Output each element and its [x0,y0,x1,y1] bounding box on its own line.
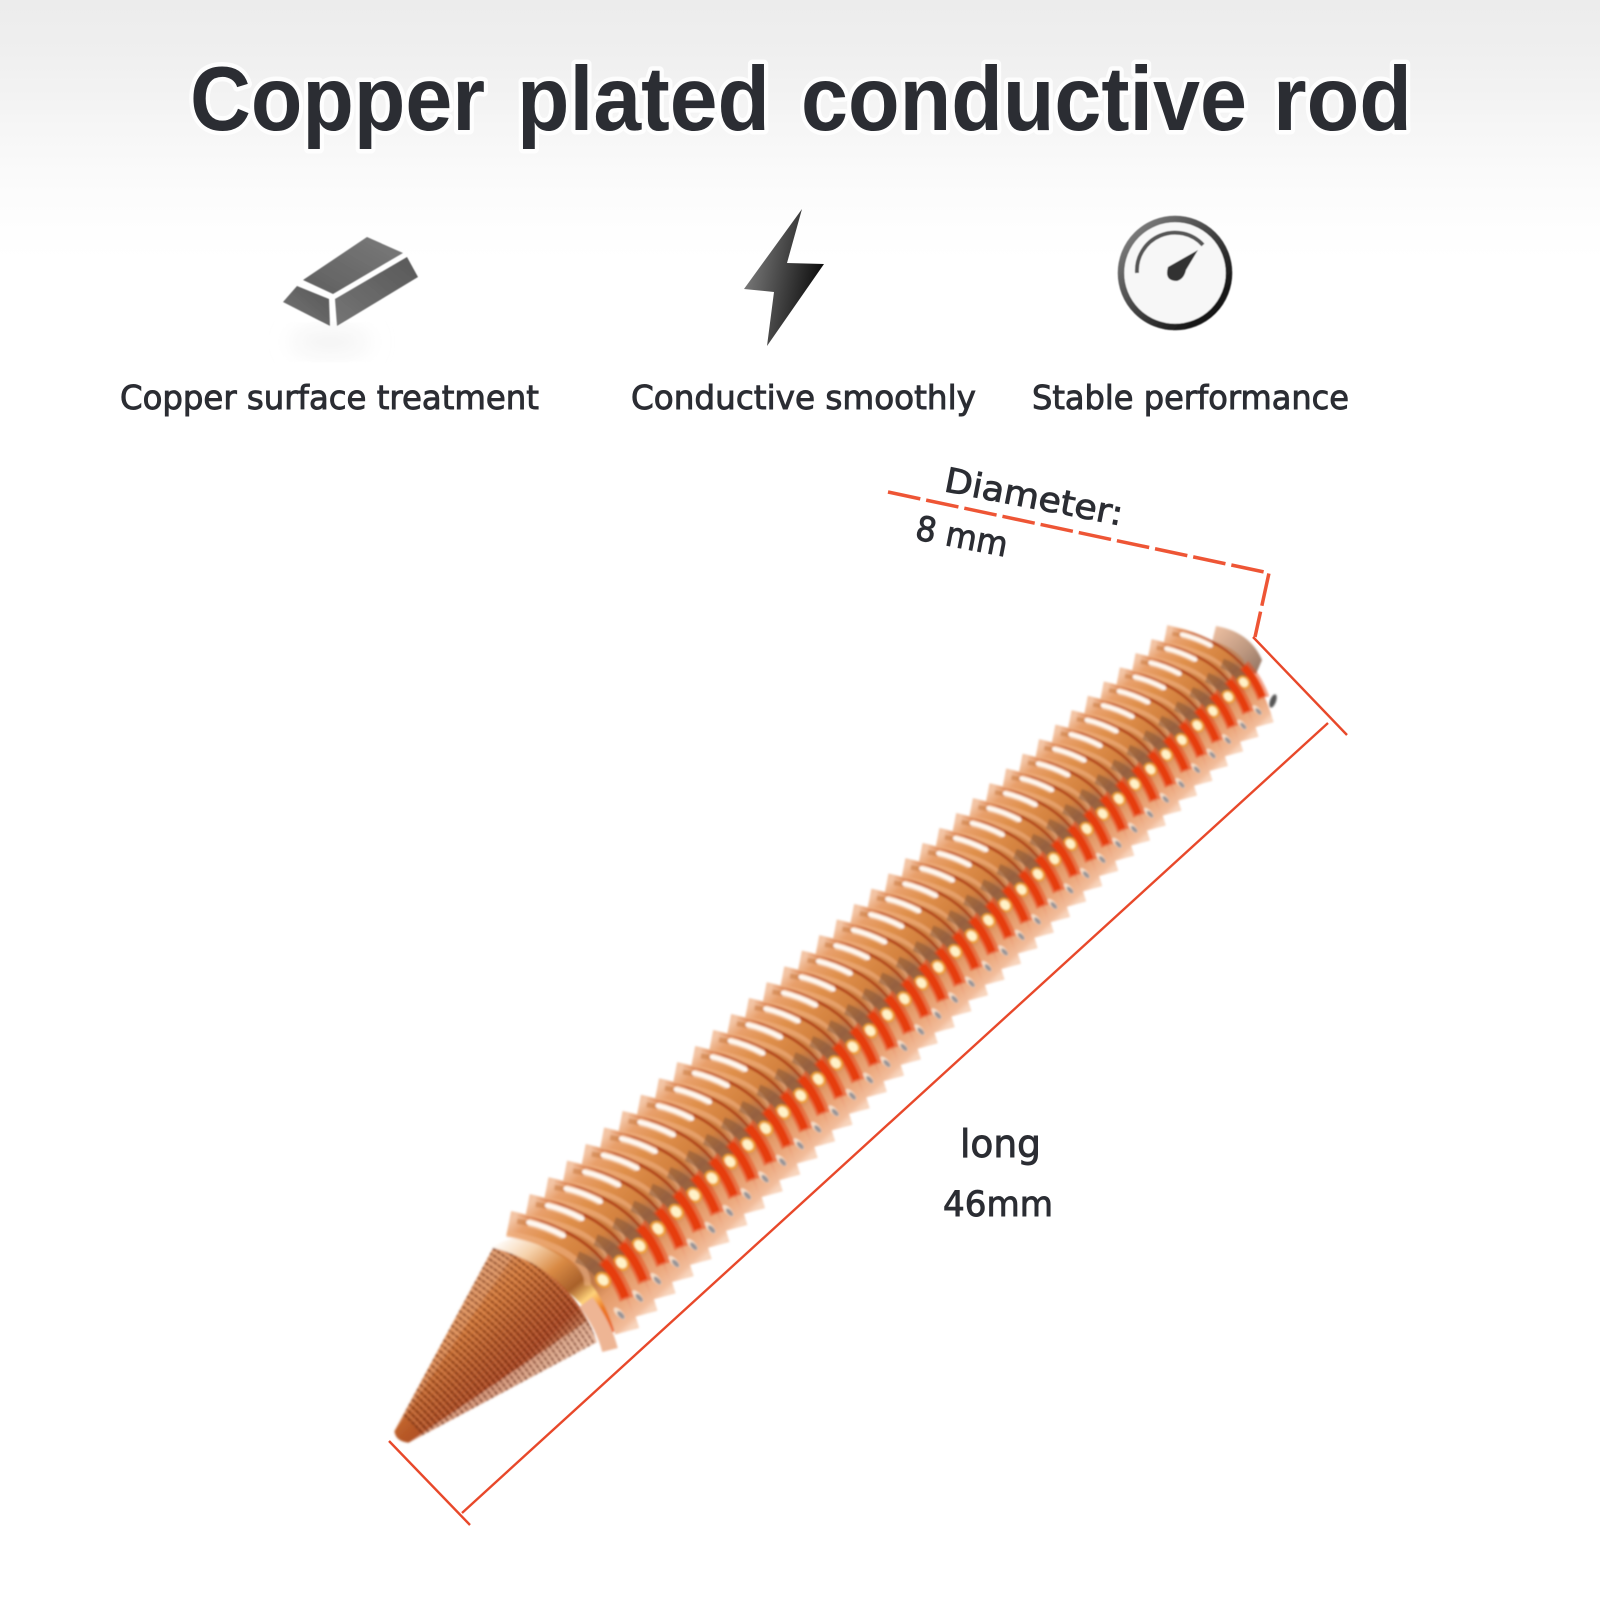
icon: copper ingot [283,237,418,352]
title: conductive [801,49,1247,150]
icon: gauge [1121,219,1229,327]
length dimension lines [389,637,1347,1525]
diameter value: 8 mm [912,509,1011,566]
rod cone tip [392,1246,598,1444]
feature: stable performance [1032,219,1349,417]
copper threaded rod [392,624,1278,1444]
diameter dimension line [888,492,1269,637]
title: Copper [190,49,485,150]
background gradient [0,0,1600,260]
title: rod [1273,49,1412,150]
rod neck [490,1236,616,1350]
title: plated [517,49,770,150]
label: conductive smoothly: Conductive smoothly [631,378,976,417]
label: copper surface treatment: Copper surface treatment [120,378,539,417]
feature: copper surface treatment [120,237,539,417]
icon: lightning bolt [744,209,824,346]
label: stable performance: Stable performance [1032,378,1349,417]
diameter label: Diameter: [941,461,1127,534]
feature: conductive smoothly [631,209,976,417]
length value: 46mm [943,1185,1053,1225]
rod end chamfer [1212,626,1278,709]
rod threads [502,609,1284,1346]
length label: long [960,1122,1041,1166]
title [190,49,1412,150]
